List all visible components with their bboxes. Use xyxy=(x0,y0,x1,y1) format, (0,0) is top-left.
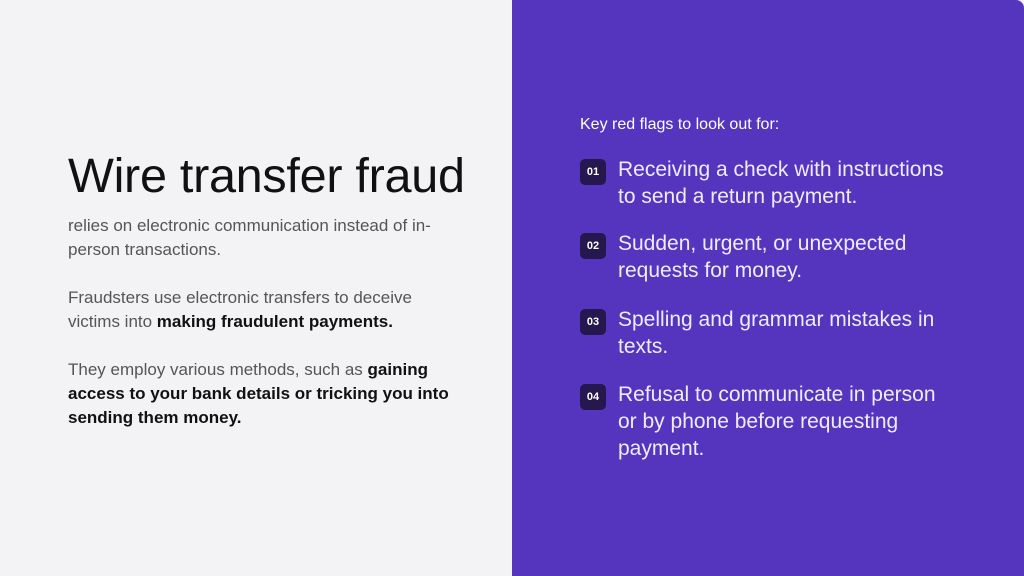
text block: methods: They employ various methods, such as gaining access to your bank details or tricking you into sending them money. xyxy=(68,360,449,427)
text block: intro: relies on electronic communication instead of in-person transactions. xyxy=(68,216,431,259)
item 04: Refusal to communicate in person or by phone before requesting payment. xyxy=(618,383,936,460)
item 01: Receiving a check with instructions to send a return payment. xyxy=(618,158,944,208)
item 03: Spelling and grammar mistakes in texts. xyxy=(618,308,934,358)
item 02: Sudden, urgent, or unexpected requests for money. xyxy=(618,232,906,282)
item 01: 01 xyxy=(587,166,599,178)
title: Wire transfer fraud xyxy=(68,149,465,203)
text block: fraudsters: Fraudsters use electronic transfers to deceive victims into making fraudulent payments. xyxy=(68,288,412,331)
item 03: 03 xyxy=(587,316,599,328)
heading: red flags: Key red flags to look out for: xyxy=(580,116,779,133)
item 02: 02 xyxy=(587,240,599,252)
item 04: 04 xyxy=(587,391,599,403)
panel: red flags xyxy=(512,0,1024,576)
